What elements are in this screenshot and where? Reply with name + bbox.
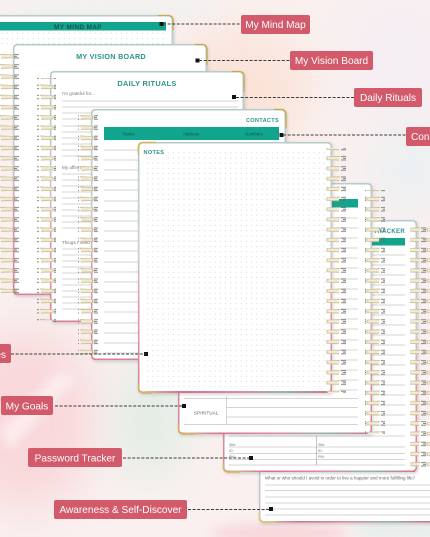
callout connector: Awareness [188, 507, 273, 511]
table rows [229, 255, 405, 465]
gold corner [178, 425, 195, 434]
notebook page: Contacts: Name [123, 132, 135, 136]
dot grid [143, 150, 327, 387]
callout connector: Contacts [280, 133, 406, 137]
page title: DAILY RITUALS [117, 79, 177, 88]
prompt text: I'm grateful for... [62, 91, 95, 96]
notebook page: Awareness & Self-Discover [259, 420, 430, 522]
page title: PASSWORD TRACKER [334, 229, 405, 235]
table header [104, 127, 279, 140]
label: My Mind Map [241, 15, 310, 34]
label: Awareness & Self-Discover: Awareness & Self-Discover [59, 505, 182, 516]
teal title bar [0, 22, 166, 30]
callout connector: My Mind Map [160, 22, 241, 26]
label: My Goals [1, 396, 53, 415]
label: Notes [0, 344, 11, 363]
callout connector: Notes [11, 352, 148, 356]
notebook page: Password Tracker: Site: [318, 443, 325, 447]
label: Contacts [406, 127, 430, 146]
gold corner [224, 462, 240, 472]
spiral rings [326, 148, 346, 393]
row label: SPIRITUAL [194, 410, 219, 416]
gold corners [138, 142, 156, 393]
question text: What or who should I avoid in order to live a happier and more fulfilling life? [265, 476, 416, 480]
notebook page: Password Tracker: PW: [229, 455, 236, 459]
notebook page: Password Tracker: PW: [318, 455, 325, 459]
gold corner accents on left stack [158, 16, 286, 128]
table divider [316, 436, 318, 465]
prompt text: My affirmations [62, 165, 94, 170]
writing lines [265, 485, 430, 515]
spiral rings [410, 226, 430, 472]
notebook page: Contacts [78, 109, 286, 360]
spiral rings [365, 190, 385, 434]
teal table header [300, 199, 358, 208]
label: Password Tracker [28, 448, 122, 467]
spiral rings [37, 78, 56, 322]
page title: MY VISION BOARD [76, 52, 146, 61]
teal table header [320, 238, 405, 246]
notebook page: Password Tracker: ID: [229, 449, 234, 453]
gold corner [260, 512, 276, 522]
table rows [104, 150, 279, 353]
page title: NOTES [144, 150, 164, 156]
label: My Mind Map: My Mind Map [245, 20, 306, 31]
label: Daily Rituals: Daily Rituals [360, 93, 416, 104]
label: Password Tracker: Password Tracker [35, 454, 116, 464]
label: Awareness & Self-Discover [54, 500, 187, 519]
callout connector: Password Tracker [123, 456, 253, 460]
callout connector: My Goals [55, 404, 186, 408]
notebook page: My Mind Map [0, 15, 173, 116]
callout connector: My Vision Board [196, 58, 290, 62]
prompt text: Things I need [62, 240, 90, 245]
notebook page: Notes [138, 142, 346, 393]
entry labels: Site: [229, 443, 236, 447]
notebook page: Contacts: Numbers [245, 132, 263, 136]
label: My Vision Board: My Vision Board [295, 56, 368, 67]
spiral rings [0, 50, 19, 295]
notebook page: Password Tracker [223, 220, 430, 472]
label: Daily Rituals [354, 88, 422, 107]
label: My Vision Board [290, 51, 373, 70]
notebook page: Contacts: Address [183, 132, 199, 136]
notebook page: Password Tracker: ID: [318, 449, 323, 453]
label: My Goals: My Goals [6, 402, 48, 412]
page title: MY MIND MAP [54, 24, 102, 31]
page title: CONTACTS [246, 118, 279, 124]
notebook page: My Vision Board [0, 44, 207, 295]
notebook page: My Goals [178, 183, 385, 434]
spiral rings [78, 115, 98, 360]
writing lines [62, 101, 238, 309]
table rows [184, 218, 358, 424]
table divider [226, 396, 228, 424]
callout connector: Daily Rituals [232, 95, 354, 99]
notebook page: Daily Rituals [37, 71, 244, 322]
